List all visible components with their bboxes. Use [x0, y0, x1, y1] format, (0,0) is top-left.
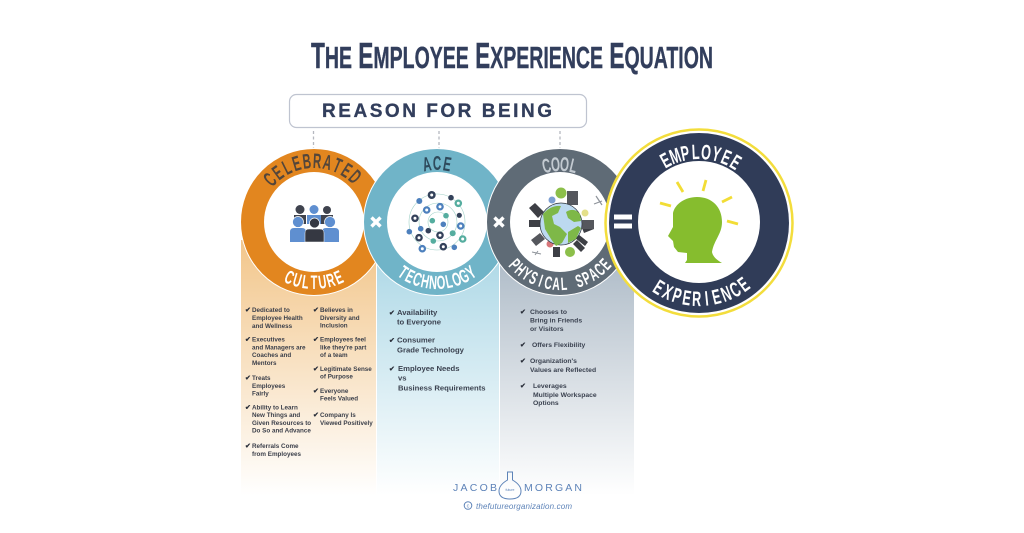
- ring text: employee: E: [656, 148, 675, 173]
- text block: culture right column: Everyone: [320, 388, 349, 395]
- text block: culture left column: Referrals Come: [252, 443, 299, 450]
- ring text: celebrated: E: [290, 151, 304, 176]
- circle: ace technology: [364, 148, 510, 296]
- title: THE EMPLOYEE EXPERIENCE EQUATION: [311, 35, 713, 76]
- ring text: experience: X: [659, 279, 677, 305]
- ring text: technology: C: [410, 269, 424, 291]
- ring text: culture: U: [290, 270, 304, 292]
- text block: technology list: Availability: [397, 308, 438, 317]
- ring text: culture: [281, 267, 347, 294]
- text block: technology list: ✔: [389, 338, 395, 344]
- ring text: employee: Y: [709, 141, 724, 167]
- text block: technology list: [389, 308, 486, 392]
- text block: physical space list: Chooses to: [530, 309, 567, 316]
- ring text: physical space: S: [526, 269, 540, 289]
- ring text: employee: L: [691, 139, 700, 164]
- ring text: celebrated: T: [330, 154, 346, 178]
- ring text: physical space: H: [510, 261, 529, 280]
- text block: culture left column: ✔: [245, 375, 251, 382]
- text block: physical space list: Offers Flexibility: [532, 342, 585, 349]
- text block: culture right column: Legitimate Sense: [320, 366, 372, 373]
- ring text: ace: E: [441, 153, 453, 176]
- text block: culture right column: of a team: [320, 352, 348, 359]
- text block: culture right column: Believes in: [320, 307, 353, 314]
- ring text: cool: O: [550, 154, 561, 176]
- text block: culture right column: Employees feel: [320, 336, 366, 344]
- circle: celebrated culture: [240, 148, 388, 296]
- text block: culture left column: ✔: [245, 404, 251, 412]
- ring text: physical space: C: [591, 260, 610, 280]
- text block: technology list: ✔: [389, 310, 395, 317]
- ring text: culture: T: [311, 273, 318, 294]
- text block: culture left column: Do So and Advance: [252, 428, 311, 434]
- text block: physical space list: Organization's: [530, 358, 577, 365]
- ring text: technology: O: [436, 273, 446, 294]
- ring text: culture: U: [317, 272, 328, 294]
- ring text: celebrated: L: [279, 155, 295, 180]
- ring text: technology: H: [419, 271, 431, 293]
- text block: culture right column: [313, 307, 373, 427]
- ring text: employee: E: [718, 144, 735, 170]
- ring text: physical space: L: [560, 275, 568, 295]
- logo: Jacob Morgan: MORGAN: [524, 482, 582, 494]
- logo: Jacob Morgan: [453, 472, 582, 511]
- text block: physical space list: Options: [533, 400, 559, 407]
- text block: culture left column: Employee Health: [252, 315, 303, 322]
- text block: culture left column: Fairly: [252, 390, 269, 398]
- ring text: experience: E: [681, 285, 693, 310]
- ring text: physical space: P: [504, 256, 523, 274]
- ring text: cool: [540, 154, 579, 178]
- ring text: celebrated: E: [337, 159, 356, 183]
- ring text: experience: I: [704, 286, 710, 311]
- text block: culture right column: ✔: [313, 336, 319, 344]
- ring text: employee: O: [700, 140, 712, 165]
- ring text: celebrated: C: [259, 169, 282, 191]
- panel: technology background: [377, 240, 499, 495]
- ring text: physical space: A: [552, 275, 561, 295]
- ring text: employee: [656, 139, 746, 175]
- ring text: technology: E: [402, 266, 418, 288]
- text block: physical space list: ✔: [520, 358, 526, 365]
- text block: culture left column: Given Resources to: [252, 420, 311, 427]
- text block: physical space list: ✔: [520, 342, 526, 349]
- ring text: physical space: E: [597, 256, 616, 274]
- ring text: technology: O: [449, 269, 464, 291]
- ring text: ace: C: [433, 153, 441, 175]
- ring text: cool: O: [559, 154, 570, 176]
- text block: culture left column: ✔: [245, 336, 251, 344]
- ring text: physical space: Y: [518, 265, 534, 285]
- ring text: experience: E: [649, 275, 669, 300]
- ring text: physical space: S: [573, 272, 586, 292]
- text block: culture left column: Coaches and: [252, 352, 291, 359]
- text block: physical space list: Leverages: [533, 383, 567, 390]
- text block: culture right column: Company Is: [320, 412, 356, 419]
- text block: physical space list: Values are Reflected: [530, 367, 596, 374]
- text block: physical space list: Multiple Workspace: [533, 392, 597, 399]
- text block: culture right column: of Purpose: [320, 374, 353, 380]
- text block: culture left column: New Things and: [252, 412, 300, 419]
- text block: culture right column: ✔: [313, 307, 319, 314]
- text block: culture left column: Executives: [252, 336, 285, 344]
- text block: physical space list: [520, 309, 597, 407]
- panel: physical space background: [500, 240, 634, 495]
- logo: Jacob Morgan: c: [467, 504, 470, 510]
- panel: culture background: [241, 240, 376, 495]
- text block: culture left column: Employees: [252, 383, 286, 390]
- text block: culture right column: like they're part: [320, 344, 367, 352]
- text block: physical space list: Bring in Friends: [530, 318, 582, 324]
- ring text: employee: E: [726, 150, 746, 175]
- text block: culture right column: ✔: [313, 388, 319, 395]
- ring text: culture: C: [281, 267, 297, 289]
- text block: culture left column: ✔: [245, 307, 251, 314]
- text block: culture right column: ✔: [313, 366, 319, 373]
- ring text: technology: N: [428, 273, 438, 294]
- logo: Jacob Morgan: JACOB: [453, 482, 497, 494]
- text block: culture right column: Inclusion: [320, 322, 348, 330]
- ring text: technology: Y: [463, 262, 481, 284]
- text block: culture left column: from Employees: [252, 451, 301, 458]
- text block: technology list: vs: [398, 374, 407, 382]
- ring text: culture: E: [331, 267, 347, 289]
- text block: culture left column: Treats: [252, 375, 271, 382]
- ring text: physical space: P: [580, 269, 594, 289]
- text block: culture left column: and Wellness: [252, 323, 293, 330]
- text block: technology list: ✔: [389, 366, 395, 373]
- ring text: physical space: C: [543, 274, 554, 294]
- ring text: physical space: I: [536, 272, 545, 292]
- ring text: experience: P: [669, 283, 685, 308]
- ring text: ace: [421, 153, 453, 176]
- ring text: experience: N: [717, 281, 735, 307]
- ring text: experience: E: [710, 284, 723, 309]
- reason for being box: [290, 94, 586, 128]
- text block: culture left column: and Managers are: [252, 344, 306, 352]
- ring text: celebrated: R: [312, 149, 322, 173]
- text block: physical space list: ✔: [520, 309, 526, 316]
- ring text: culture: L: [301, 272, 310, 294]
- text block: technology list: Employee Needs: [398, 364, 460, 373]
- ring text: celebrated: D: [344, 165, 366, 188]
- icon: globe with buildings: [529, 188, 602, 257]
- ring text: celebrated: E: [268, 161, 288, 185]
- reason for being box: REASON FOR BEING: [322, 101, 552, 122]
- text block: technology list: to Everyone: [397, 318, 442, 326]
- text block: technology list: Grade Technology: [397, 346, 465, 354]
- ring text: experience: [649, 272, 754, 311]
- ring text: culture: R: [324, 270, 338, 292]
- dashed connectors: [314, 131, 560, 150]
- ring text: physical space: [504, 256, 616, 295]
- icon: multiply sign between technology and physical space: [494, 218, 504, 226]
- text block: physical space list: or Visitors: [530, 326, 564, 333]
- icon: network: [406, 191, 467, 252]
- ring text: technology: G: [456, 266, 473, 288]
- ring text: celebrated: B: [301, 149, 312, 174]
- text block: culture left column: Dedicated to: [252, 307, 290, 314]
- logo: Jacob Morgan: thefutureorganization.com: [476, 502, 572, 511]
- ring text: experience: C: [725, 277, 745, 302]
- text block: technology list: Consumer: [397, 336, 435, 344]
- icon: equals sign: [614, 214, 632, 228]
- ring text: technology: T: [394, 262, 412, 284]
- text block: culture left column: Ability to Learn: [252, 404, 298, 412]
- ring text: technology: L: [444, 271, 454, 293]
- icon: flask: future: [506, 488, 515, 492]
- text block: culture right column: ✔: [313, 412, 319, 419]
- text block: technology list: Business Requirements: [398, 384, 486, 392]
- ring text: cool: C: [540, 155, 553, 178]
- circle: employee experience: [606, 130, 792, 316]
- ring text: employee: M: [666, 143, 684, 169]
- icon: head with light rays: [660, 180, 738, 263]
- ring text: cool: L: [567, 155, 579, 178]
- circle: cool physical space: [486, 148, 634, 296]
- text block: culture left column: ✔: [245, 443, 251, 450]
- text block: culture right column: Diversity and: [320, 315, 360, 322]
- ring text: ace: A: [421, 153, 433, 176]
- ring text: experience: R: [692, 286, 702, 311]
- ring text: technology: [394, 262, 481, 294]
- icon: people: [290, 205, 339, 242]
- text block: culture left column: [245, 307, 311, 458]
- ring text: celebrated: A: [321, 150, 334, 175]
- ring text: experience: E: [733, 272, 754, 297]
- text block: culture right column: Viewed Positively: [320, 420, 373, 427]
- ring text: physical space: A: [585, 265, 603, 286]
- ring text: employee: P: [679, 140, 692, 166]
- icon: multiply sign between culture and technology: [372, 218, 380, 226]
- text block: physical space list: ✔: [520, 383, 526, 390]
- text block: culture left column: Mentors: [252, 360, 277, 367]
- text block: culture right column: Feels Valued: [320, 396, 358, 402]
- ring text: celebrated: [259, 149, 366, 191]
